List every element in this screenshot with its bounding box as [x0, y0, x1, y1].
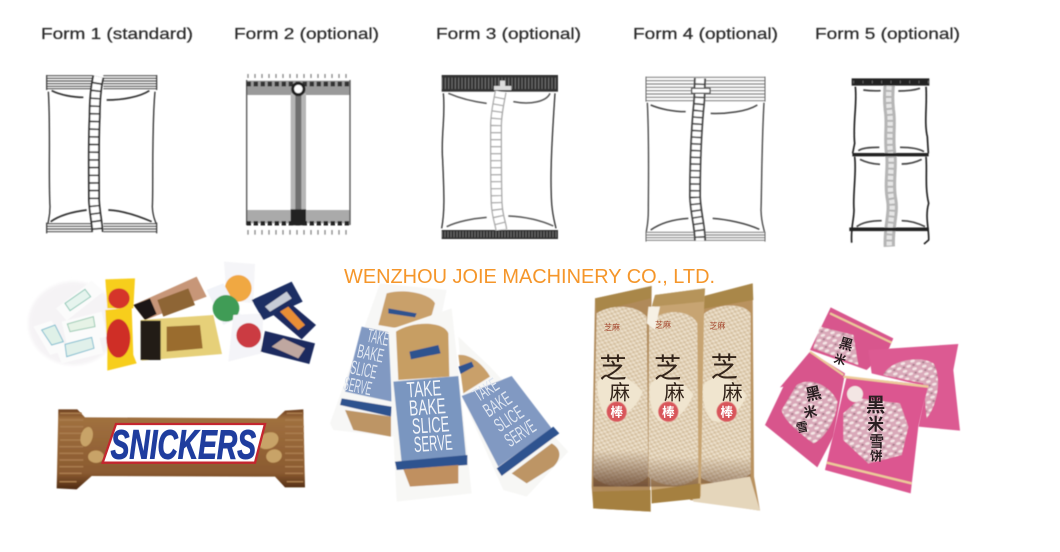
diagram: Form 1 bag	[47, 75, 157, 233]
pink bag: back right	[868, 344, 960, 431]
diagram: Form 4 bag	[646, 77, 765, 242]
rice bar labels	[597, 319, 747, 422]
candy: round coloured sweets	[207, 262, 263, 362]
pink bag text: 黑	[866, 396, 885, 417]
bread pack: left label text: BAKE	[355, 341, 386, 367]
rice bar: left	[592, 286, 652, 512]
wrapper body	[57, 409, 305, 489]
bread pack: right label text: SLICE	[491, 402, 528, 437]
bread pack: right label text: BAKE	[480, 388, 516, 422]
pink bag text: 米	[802, 402, 819, 421]
label centre: 棒	[662, 405, 675, 420]
photo: bread packs	[330, 283, 568, 502]
heading: Form 5 (optional): Form 5 (optional)	[815, 26, 960, 43]
watermark: company name: WENZHOU JOIE MACHINERY CO., LTD.	[344, 265, 715, 288]
label left: 芝麻	[604, 322, 620, 332]
candy: white mint packets	[28, 281, 118, 365]
photo: assorted wrapped candies	[28, 262, 316, 371]
bread pack: right label text	[470, 370, 540, 453]
bread pack: left label text: SERVE	[341, 374, 373, 400]
heading: Form 2 (optional): Form 2 (optional)	[234, 26, 379, 43]
diagram: Form 2 bag	[247, 76, 350, 232]
bread pack: centre label text: SLICE	[411, 411, 450, 439]
pink bag text: 米	[867, 415, 884, 434]
pink bag: front	[825, 377, 928, 493]
candy: navy packets	[252, 282, 316, 364]
bread pack: centre	[388, 308, 472, 502]
label centre: 麻	[664, 381, 685, 404]
label right: 麻	[722, 381, 743, 404]
photo: Snickers bar	[57, 409, 305, 489]
bread pack: left	[330, 283, 447, 437]
heading: Form 4 (optional): Form 4 (optional)	[633, 26, 778, 43]
bread pack: right label text: TAKE	[470, 375, 503, 407]
bread pack: centre label text: BAKE	[408, 393, 446, 421]
bread pack: left label text	[341, 323, 391, 402]
logo text: SNICKERS	[111, 421, 256, 467]
label left: 麻	[609, 381, 630, 404]
pink bag: left	[765, 352, 845, 467]
label right	[703, 320, 747, 422]
pink bag text: 雪	[795, 419, 809, 436]
pink bag text	[795, 334, 885, 464]
logo panel	[103, 424, 265, 463]
bread pack: right label text: SERVE	[501, 416, 540, 452]
heading: Form 3 (optional): Form 3 (optional)	[436, 26, 581, 43]
rice bar: right	[690, 283, 760, 511]
candy: black and gold packs	[133, 277, 222, 361]
pink bag text: 黑	[837, 334, 855, 354]
label centre	[650, 319, 693, 422]
label left: 棒	[610, 405, 623, 420]
pink bag text: 雪	[869, 434, 884, 451]
rice bar: centre	[647, 288, 705, 503]
bread pack: centre label text: SERVE	[413, 429, 453, 457]
bread pack: left label text: SLICE	[348, 358, 379, 384]
bread pack: centre label text: TAKE	[406, 375, 442, 402]
label left	[597, 322, 643, 422]
pink bag text: 米	[832, 350, 848, 368]
candy: yellow and red wrappers	[105, 278, 137, 371]
bread pack: right	[458, 337, 568, 497]
pink bag: back top	[810, 307, 893, 370]
label right: 棒	[720, 405, 733, 420]
photo: pink rice cracker bags	[765, 307, 960, 493]
label left: 芝	[599, 352, 627, 383]
photo: rice bars	[592, 283, 760, 512]
pink bag text: 黑	[804, 384, 823, 405]
wrapper crimps	[59, 413, 303, 482]
pink bag text: 饼	[870, 449, 883, 464]
peanuts	[78, 425, 283, 465]
diagram: Form 5 double bag	[849, 80, 929, 247]
label right: 芝麻	[709, 320, 725, 330]
label centre: 芝麻	[655, 319, 671, 329]
label right: 芝	[711, 352, 738, 383]
label centre: 芝	[654, 352, 681, 383]
photo: bread packs: TAKE	[365, 326, 391, 351]
heading: Form 1 (standard): Form 1 (standard)	[41, 26, 193, 43]
bread pack: centre label text	[406, 375, 453, 457]
diagram: Form 3 bag	[442, 75, 558, 239]
